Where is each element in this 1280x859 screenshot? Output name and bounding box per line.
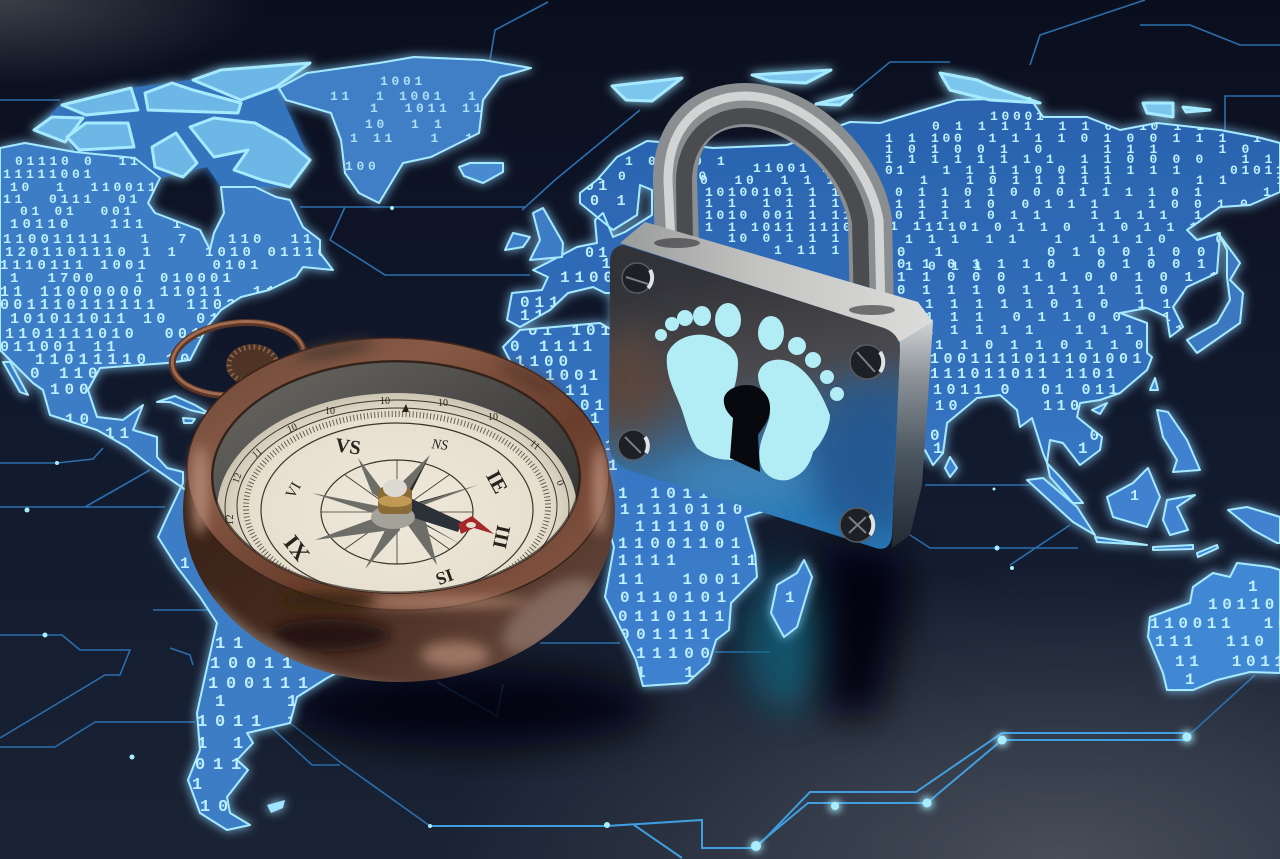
digits: Europe and North Africa: 0 1: [590, 193, 630, 210]
digits: South America: 10011: [210, 655, 300, 674]
island: Baja strip: [3, 362, 28, 395]
dial edge shade: [212, 361, 580, 593]
digits: Australia: 1: [1248, 578, 1262, 596]
compass front rim: [182, 331, 614, 617]
digits: South America: 0111: [195, 756, 267, 775]
islands: Sulawesi and Philippines: [1157, 410, 1200, 535]
dial numerals: XI: [279, 531, 314, 566]
digits: North America: 1201101110 1 1 1010 0111011: [5, 245, 355, 261]
islands: Malay, Sumatra, Java: [1027, 463, 1147, 545]
digits: arch window over Russia: 1 1 1011 1110: [705, 220, 855, 235]
circuit traces: bright double lines: [430, 733, 1187, 858]
digits: Europe and North Africa: 1: [605, 437, 620, 455]
digits: arch window over Russia: 11001 1: [753, 161, 834, 176]
islands: Japan: [1187, 233, 1243, 353]
islands: Sri Lanka, Taiwan, Hainan: [945, 378, 1158, 477]
digits: North America: 1110111 1001 0101: [0, 258, 263, 274]
network nodes: [24, 206, 1193, 852]
compass needle: [405, 498, 494, 534]
digits: Europe and North Africa: 011: [520, 294, 564, 312]
digits: Europe and North Africa: 111: [520, 307, 564, 325]
digits: Australia: 111 110: [1155, 633, 1269, 651]
compass loop: [169, 315, 307, 402]
compass inner wall: [212, 361, 580, 593]
case patina: [208, 573, 596, 682]
compass dial face: [212, 361, 580, 593]
dial numerals: 10: [325, 406, 335, 417]
right toes: [758, 316, 844, 401]
digits: Europe and North Africa: 1100: [560, 269, 618, 287]
continent: North and South America: [0, 143, 400, 830]
left toes: [655, 303, 741, 341]
digits: South America: 1011 10: [197, 713, 323, 732]
digits: Africa: 001111: [620, 626, 717, 644]
digits: South America: 100111: [208, 675, 316, 694]
digits: Asia: 10001: [990, 109, 1048, 124]
compass crown: [226, 344, 280, 386]
digits: North America: 001110111111 1102: [0, 297, 239, 314]
digits: South America: 11: [215, 635, 251, 654]
digits: Asia: 1 1 1 0 1 1 0 0 1 1 0 0 0 1: [925, 310, 1275, 326]
digits: arch window over Russia: 0 10 1 1 1: [700, 173, 838, 188]
Canadian Arctic backdrop: [35, 63, 310, 187]
digits: Greenland: 1 1011 11: [370, 101, 485, 116]
digits: arch window over Russia: 1 0 1 1 0: [595, 169, 710, 184]
islands: Arctic Eurasia: [612, 70, 1210, 117]
digits: Europe and North Africa: 1: [575, 256, 615, 273]
dial numerals: IS: [433, 565, 456, 589]
digits: Greenland: 100: [345, 159, 380, 174]
digits: North America: 10 1 110011 0 10: [10, 180, 217, 195]
dial numerals: 10: [488, 412, 498, 423]
digits: Europe and North Africa: [510, 180, 625, 470]
digits: Asia: [885, 109, 1280, 458]
islands: Britain and Ireland: [505, 208, 563, 260]
dial numerals: 10: [438, 398, 448, 409]
digits: arch window over Russia: [595, 154, 986, 274]
digits: Africa: 0110111: [618, 608, 731, 626]
digits: Africa: 111100: [635, 518, 732, 536]
rim patina: [192, 336, 606, 607]
plate highlight: [670, 456, 810, 504]
digits: Africa: 11110110: [620, 501, 749, 519]
shackle collars: [654, 238, 895, 315]
digits: Greenland: 11 1 1001 1 1: [330, 89, 503, 104]
digits: North America: 101011011 10 011: [10, 311, 236, 328]
screws: [618, 263, 884, 542]
continent: Greenland: [279, 57, 531, 203]
digits: North America: 10110 111 1: [10, 217, 185, 233]
digits: North America: 1101111010 00100: [5, 326, 231, 343]
digits: North America: 1: [180, 555, 195, 573]
digits: Europe and North Africa: 1001: [545, 367, 603, 385]
digits: Europe and North Africa: 01: [585, 245, 612, 262]
digits: Australia: 1: [1185, 671, 1199, 689]
icon: footprints: [655, 303, 844, 480]
digits: Europe and North Africa: 01 101 1: [528, 322, 644, 340]
digits: Greenland: [330, 76, 481, 170]
padlock front plate: [609, 245, 900, 549]
continent: Australia: [1148, 563, 1280, 690]
digits: North America: 10: [65, 411, 94, 429]
dial numerals: 11: [527, 438, 542, 453]
digits: Asia: 1011 0 01 011: [933, 382, 1122, 399]
left foot: [667, 335, 738, 460]
digits: Borneo: 1: [1130, 488, 1143, 505]
digits: arch window over Russia: 1 0 1 0 1: [625, 154, 729, 169]
digits: Asia: 1001111011101001: [930, 351, 1146, 368]
padlock top face: [620, 222, 933, 342]
padlock: [595, 96, 933, 560]
dial numerals: VS: [334, 434, 362, 460]
digits: North America: 110011111 1 7 110 11: [3, 232, 316, 248]
digits: South America: 10: [200, 798, 236, 817]
dial numerals: 10: [285, 421, 299, 436]
islands: Canadian Arctic: [34, 63, 310, 187]
digits: Asia: 111011011 1101 11: [930, 366, 1173, 383]
digits: Greenland: 1 11 1 1001: [350, 131, 511, 146]
digits: Africa: 1 11: [636, 664, 717, 682]
digits: North America: 1 1700 1 010001: [10, 271, 235, 287]
digits: South America: 1 110: [215, 693, 341, 712]
dial numerals: III: [488, 523, 514, 551]
digits: Africa: 11001101: [618, 535, 747, 553]
island: Borneo: [1107, 468, 1160, 527]
padlock shackle: [668, 96, 881, 312]
dial rings: [224, 400, 570, 586]
plate brown reflection: [595, 330, 665, 440]
digits: North America: 11 11000000 11011 11: [0, 284, 279, 301]
digits: Europe and North Africa: 1100 1: [515, 353, 631, 371]
digits: Australia: [1150, 578, 1280, 689]
digits: Europe and North Africa: 0 1111 1: [510, 338, 641, 356]
digits: Africa: 1 1011: [618, 485, 715, 503]
icon: keyhole: [724, 385, 770, 472]
digits: arch window over Russia: 10100101 1 1 1: [705, 185, 866, 200]
dial numerals: IE: [481, 467, 513, 497]
digits: Europe and North Africa: 1: [608, 457, 623, 475]
dial numerals: 10: [380, 396, 390, 407]
digits: Madagascar: 1: [785, 589, 800, 607]
digits: Greenland: 1001: [380, 74, 426, 89]
island: Madagascar: [771, 560, 812, 637]
compass centre pivot: [371, 479, 415, 529]
digits: Africa: 11 1001: [618, 571, 747, 589]
digits: arch window over Russia: 1 0 1 1: [905, 259, 986, 274]
digits: North America: 0 110: [30, 365, 103, 383]
digits: Europe and North Africa: 01: [580, 397, 609, 415]
digits: Africa: 1111 11: [618, 552, 763, 570]
digits: arch window over Russia: 1 1 1 1 1 10: [705, 196, 855, 211]
digits: Asia: 1 1 1 1 1 0 1 0 1 1 0 1 1 1: [925, 297, 1280, 313]
digits: Asia: 1 1 1 1 1 1 1 1 1 1 0 1: [925, 323, 1238, 339]
digits: Europe and North Africa: 1: [590, 410, 605, 428]
compass case: [183, 338, 615, 682]
teal reflection near Madagascar: [745, 570, 825, 710]
plate blue reflection: [804, 371, 898, 548]
digits: Greenland: 10 1 1 01 110: [365, 117, 549, 132]
continent: Europe, Asia and Africa: [503, 98, 1280, 686]
digits: North America: 11: [105, 425, 134, 443]
dial numerals: NS: [430, 437, 449, 454]
digits: Europe and North Africa: 01: [585, 178, 612, 195]
dial numerals: 12: [231, 472, 244, 485]
digits: arch window over Russia: 10 0 1 1 1 0: [705, 231, 866, 246]
digits: North America: 100: [50, 381, 94, 399]
islands: Cuba and Hispaniola: [157, 396, 212, 423]
right foot: [758, 360, 830, 480]
dial numerals: VI: [283, 480, 305, 501]
islet: Falklands: [267, 800, 285, 813]
digits: Africa: [618, 485, 763, 682]
digits: Africa: 11100: [636, 645, 717, 663]
shadow under compass: [285, 668, 655, 748]
digits: North America: [1, 156, 322, 568]
digits: Australia: 10110: [1208, 596, 1279, 614]
digits: North America: 11 0111 01 1: [3, 192, 164, 207]
digits: Europe and North Africa: 11: [565, 382, 594, 400]
digits: South America: 1 11 1: [197, 735, 305, 754]
digits: North America: 11011110 1010: [35, 351, 224, 369]
digits: South America: [193, 637, 308, 811]
compass rose: [312, 455, 478, 569]
digits: North America: 11111001 11: [3, 167, 187, 182]
digits: arch window over Russia: 1 1 1 0: [890, 219, 971, 234]
dial numerals: T2: [225, 514, 236, 526]
padlock side face: [892, 322, 933, 548]
digits: Asia: 1 1: [933, 440, 1093, 458]
digits: arch window over Russia: 1010 001 1 11: [705, 208, 855, 223]
island: New Guinea and Sunda chain: [1153, 507, 1280, 557]
digits: North America: 01 01 001: [20, 204, 135, 219]
digits: Asia: 1 1 1 1 1 1 1 1 1 0 0 0: [905, 232, 1250, 247]
digits: North America: 011001 11: [0, 339, 120, 356]
dial numerals: [225, 396, 566, 589]
digits: Asia: 10 110: [935, 398, 1084, 415]
digits: North America: 01110 0 111: [15, 154, 153, 169]
dial numerals: 0: [554, 479, 566, 487]
island: Iceland: [459, 163, 503, 183]
dial numerals: 11: [250, 446, 265, 461]
digits: Asia: 0 010: [930, 427, 1133, 445]
digits: arch window over Russia: 1 11 1: [705, 243, 843, 258]
digits: South America: 1: [192, 776, 210, 795]
compass: [169, 315, 615, 700]
digits: Africa: 0110101: [620, 589, 733, 607]
shadow under padlock: [825, 540, 905, 715]
